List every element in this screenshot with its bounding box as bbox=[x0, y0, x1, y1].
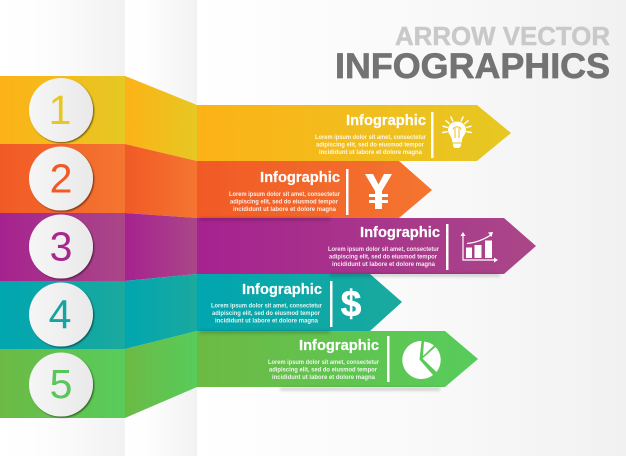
text block: step 2: Lorem ipsum dolor sit amet, consectetur bbox=[229, 191, 341, 198]
arrow edge shadows bbox=[200, 218, 500, 390]
text block: step 5: incididunt ut labore et dolore magna bbox=[272, 374, 376, 381]
text block: step 5: Infographic bbox=[299, 338, 379, 354]
number badge 2 bbox=[29, 146, 93, 210]
number badge 1 bbox=[29, 78, 93, 142]
panel: step 4 teal band and arrow bbox=[0, 274, 402, 349]
text block: step 2: incididunt ut labore et dolore magna bbox=[233, 206, 337, 213]
icon: light bulb bbox=[443, 117, 471, 148]
text block: step 1: adipiscing elit, sed do eiusmod tempor bbox=[316, 142, 425, 148]
icon: pie chart bbox=[402, 341, 441, 379]
text block: step 3: incididunt ut labore et dolore magna bbox=[332, 261, 436, 268]
text block: step 5: adipiscing elit, sed do eiusmod tempor bbox=[269, 366, 378, 374]
text block: step 5 bbox=[268, 336, 390, 382]
text block: step 4 bbox=[211, 281, 332, 327]
text block: step 3 bbox=[328, 224, 448, 270]
text block: step 1: incididunt ut labore et dolore magna bbox=[319, 149, 423, 156]
number badge 4: 4 bbox=[49, 292, 71, 338]
text block: step 4: incididunt ut labore et dolore magna bbox=[215, 318, 319, 324]
icon: bar chart bbox=[460, 232, 498, 262]
number badge 2: 2 bbox=[50, 156, 72, 202]
text block: step 1: Infographic bbox=[346, 113, 426, 129]
title bbox=[335, 21, 610, 86]
title: INFOGRAPHICS bbox=[335, 46, 610, 86]
number badge 3 bbox=[29, 214, 93, 278]
text block: step 2: Infographic bbox=[260, 170, 340, 186]
icon: yen sign bbox=[365, 174, 392, 209]
text block: step 4: Lorem ipsum dolor sit amet, consectetur bbox=[211, 302, 323, 310]
text block: step 4: Infographic bbox=[242, 282, 322, 298]
panel: step 1 yellow band and arrow bbox=[0, 76, 511, 161]
icon: dollar sign: $ bbox=[341, 283, 362, 324]
text block: step 4: adipiscing elit, sed do eiusmod tempor bbox=[212, 310, 321, 317]
text block: step 2: adipiscing elit, sed do eiusmod tempor bbox=[230, 198, 339, 206]
text block: step 1: Lorem ipsum dolor sit amet, consectetur bbox=[315, 134, 427, 141]
number badge 5: 5 bbox=[50, 361, 72, 407]
text block: step 3: adipiscing elit, sed do eiusmod tempor bbox=[329, 254, 438, 260]
text block: step 3: Lorem ipsum dolor sit amet, consectetur bbox=[328, 246, 440, 253]
number badge 4 bbox=[29, 282, 93, 346]
panel: step 2 orange band and arrow bbox=[0, 144, 432, 218]
title: ARROW VECTOR bbox=[395, 21, 610, 51]
panel: step 3 purple band and arrow bbox=[0, 213, 536, 281]
text block: step 1 bbox=[315, 112, 434, 158]
text block: step 5: Lorem ipsum dolor sit amet, consectetur bbox=[268, 359, 380, 366]
number badge 1: 1 bbox=[49, 87, 71, 133]
panel: step 5 green band and arrow bbox=[0, 331, 478, 418]
number badge 3: 3 bbox=[50, 224, 72, 270]
text block: step 2 bbox=[229, 169, 348, 215]
number badge 5 bbox=[29, 352, 93, 416]
text block: step 3: Infographic bbox=[360, 225, 440, 241]
